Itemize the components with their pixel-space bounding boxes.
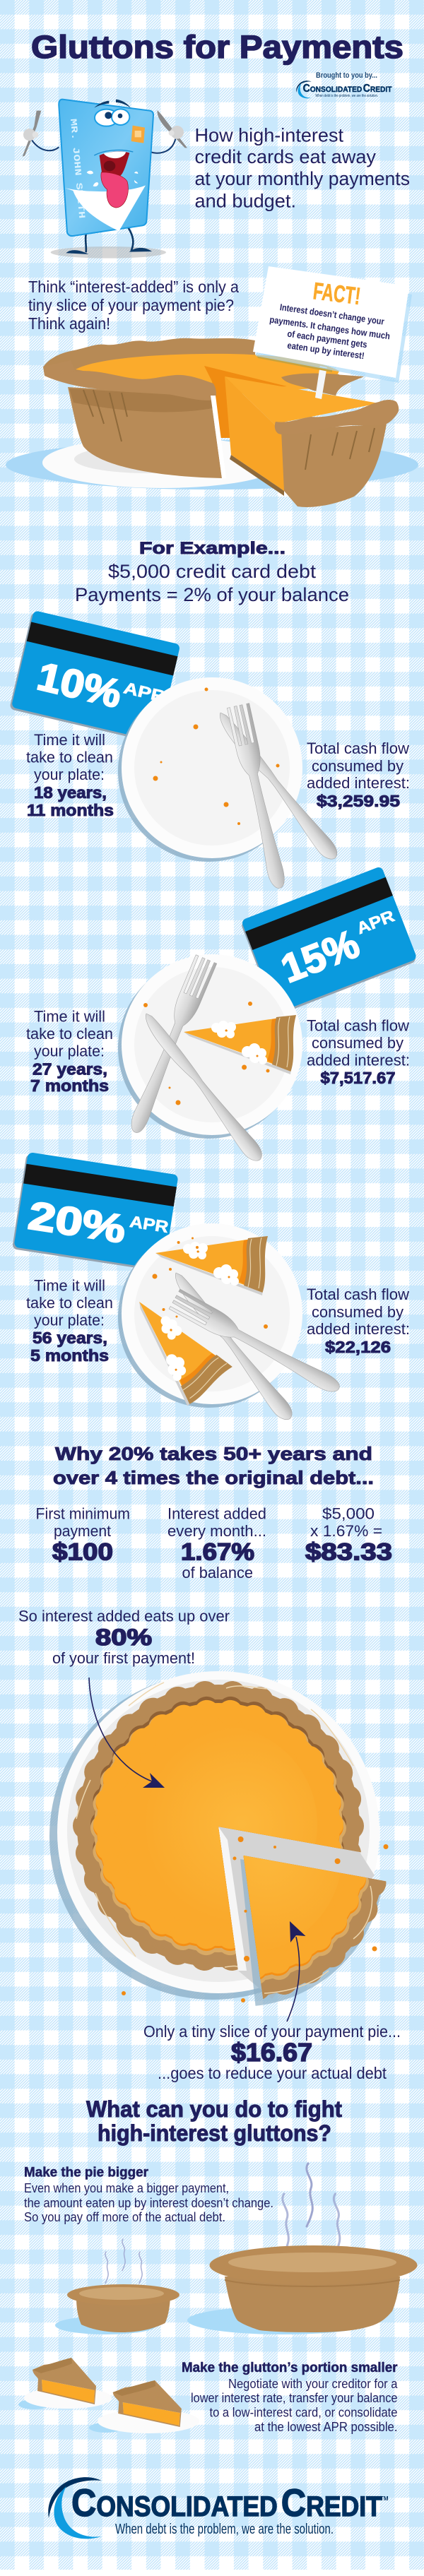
text: cash flow 20%: added interest: bbox=[307, 1320, 410, 1338]
text: 80% callout: 80% bbox=[95, 1625, 152, 1650]
text: time 20%: your plate: bbox=[34, 1311, 105, 1329]
stat: interest added: every month... bbox=[167, 1522, 266, 1540]
callout: FACT sign: of each payment gets bbox=[287, 328, 368, 350]
text: make the pie bigger bbox=[24, 2166, 273, 2224]
heading: what can you do bbox=[86, 2096, 342, 2146]
text: time 20%: 5 months bbox=[30, 1346, 109, 1365]
small logo: When debt is the problem, we are the solution. bbox=[315, 94, 378, 98]
text: time 10%: take to clean bbox=[26, 749, 113, 766]
text: time 10%: 11 months bbox=[27, 801, 114, 819]
question text bbox=[28, 278, 239, 333]
text: make the pie bigger: the amount eaten up by interest doesn’t change. bbox=[24, 2196, 273, 2210]
text: time 10%: 18 years, bbox=[34, 783, 107, 802]
pie slice bbox=[243, 1856, 386, 1999]
stat: interest amount: $83.33 bbox=[305, 1538, 392, 1565]
callout: FACT sign: payments. It changes how much bbox=[269, 314, 391, 341]
text: time 20%: Time it will bbox=[34, 1277, 105, 1294]
text: cash flow 20%: Total cash flow bbox=[307, 1286, 409, 1303]
icon: two pie slices on plates bbox=[18, 2358, 199, 2433]
text: tiny slice callout bbox=[143, 2022, 401, 2082]
heading: for example: For Example... bbox=[139, 539, 285, 558]
text: make the pie bigger: Make the pie bigger bbox=[24, 2166, 149, 2180]
text: cash flow 20% bbox=[307, 1286, 410, 1356]
intro text bbox=[195, 124, 410, 212]
heading: what can you do: What can you do to fight bbox=[86, 2096, 342, 2122]
plate: 20% with two pie slices bbox=[110, 1223, 343, 1424]
text: make the portion smaller: to a low-interest card, or consolidate bbox=[209, 2406, 397, 2420]
logo: Consolidated Credit: When debt is the problem, we are the solution. bbox=[115, 2522, 334, 2537]
text: make the pie bigger: So you pay off more of the actual debt. bbox=[24, 2210, 225, 2224]
text: cash flow 10%: added interest: bbox=[307, 774, 410, 792]
callout: FACT sign: Interest doesn’t change your bbox=[279, 302, 385, 327]
logo: Consolidated Credit: CONSOLIDATED CREDIT bbox=[71, 2481, 382, 2525]
text: time 15%: 27 years, bbox=[33, 1060, 107, 1078]
card: 10% APR: APR bbox=[122, 678, 167, 706]
text: time 20% bbox=[26, 1277, 113, 1365]
callout: FACT sign: FACT! bbox=[312, 278, 362, 310]
stat: first minimum payment: $100 bbox=[52, 1538, 113, 1565]
card: 10% APR bbox=[9, 610, 180, 744]
text: cash flow 15%: consumed by bbox=[312, 1034, 404, 1052]
heading: why 20%: over 4 times the original debt... bbox=[53, 1467, 374, 1488]
arrow: to pie remainder bbox=[89, 1678, 165, 1788]
icon: credit card mascot bbox=[23, 100, 187, 259]
plate: 15% with pie slice bbox=[118, 954, 302, 1165]
title: Gluttons for Payments bbox=[31, 29, 404, 65]
text: tiny slice callout: $16.67 bbox=[231, 2038, 312, 2067]
card: 10% APR: 10% bbox=[33, 653, 126, 716]
text: tiny slice callout: Only a tiny slice of your payment pie... bbox=[143, 2022, 401, 2041]
text: cash flow 10%: consumed by bbox=[312, 757, 404, 775]
slice shadow bbox=[240, 1859, 381, 2006]
intro text: at your monthly payments bbox=[195, 168, 410, 189]
illustration: pie with slice pulled out bbox=[6, 338, 418, 507]
card: 20% APR: APR bbox=[129, 1212, 170, 1236]
icon: big pie bbox=[187, 2245, 417, 2334]
heading: why 20% bbox=[53, 1443, 374, 1488]
text: time 15%: 7 months bbox=[30, 1076, 109, 1095]
text: time 15%: your plate: bbox=[34, 1043, 105, 1060]
intro text: How high-interest bbox=[195, 124, 343, 146]
heading: what can you do: high-interest gluttons? bbox=[98, 2120, 331, 2146]
text: time 10% bbox=[26, 731, 114, 819]
text: time 20%: 56 years, bbox=[33, 1329, 107, 1347]
card: 20% APR: 20% bbox=[25, 1193, 129, 1252]
text: 80% callout: So interest added eats up over bbox=[18, 1608, 230, 1625]
stat: interest added: of balance bbox=[182, 1564, 253, 1581]
text: make the pie bigger: Even when you make a bigger payment, bbox=[24, 2181, 229, 2195]
text: time 15% bbox=[26, 1007, 113, 1095]
callout: FACT sign: eaten up by interest! bbox=[287, 340, 365, 361]
icon: small pie bbox=[55, 2239, 179, 2334]
card: 15% APR: APR bbox=[354, 906, 397, 937]
heading: for example bbox=[75, 539, 349, 605]
small logo bbox=[296, 81, 392, 98]
heading: for example: Payments = 2% of your balance bbox=[75, 584, 349, 605]
text: cash flow 15% bbox=[307, 1017, 410, 1087]
text: time 10%: Time it will bbox=[34, 731, 105, 749]
stat: first minimum payment: First minimum bbox=[35, 1504, 130, 1523]
stat: first minimum payment bbox=[35, 1504, 130, 1565]
arrow: to pie slice bbox=[287, 1921, 305, 2022]
card: 15% APR: 15% bbox=[275, 921, 365, 991]
text: make the portion smaller: Make the glutton’s portion smaller bbox=[182, 2361, 398, 2375]
illustration: large pie top view bbox=[49, 1671, 389, 2007]
sponsor credit bbox=[296, 71, 392, 98]
text: time 20%: take to clean bbox=[26, 1294, 113, 1312]
text: make the portion smaller: Negotiate with your creditor for a bbox=[228, 2377, 398, 2391]
intro text: credit cards eat away bbox=[195, 146, 376, 167]
card: 15% APR bbox=[240, 866, 418, 1016]
stat: interest added: Interest added bbox=[167, 1504, 266, 1523]
logo: Consolidated Credit bbox=[48, 2477, 389, 2539]
text: make the portion smaller: lower interest rate, transfer your balance bbox=[191, 2391, 397, 2405]
question text: tiny slice of your payment pie? bbox=[28, 296, 234, 314]
card: 20% APR bbox=[12, 1152, 179, 1272]
text: 80% callout: of your first payment! bbox=[52, 1649, 195, 1667]
mascot name: MR. JOHN SMITH bbox=[68, 118, 87, 219]
question text: Think “interest-added” is only a bbox=[28, 278, 239, 296]
text: tiny slice callout: ...goes to reduce your actual debt bbox=[158, 2064, 387, 2082]
text: cash flow 15%: $7,517.67 bbox=[321, 1069, 396, 1087]
text: cash flow 10%: Total cash flow bbox=[307, 740, 409, 757]
heading: why 20%: Why 20% takes 50+ years and bbox=[55, 1443, 372, 1464]
text: 80% callout bbox=[18, 1608, 230, 1667]
stat: first minimum payment: payment bbox=[54, 1522, 111, 1540]
text: time 10%: your plate: bbox=[34, 766, 105, 783]
stat: interest added: 1.67% bbox=[181, 1538, 254, 1565]
stat: interest amount: x 1.67% = bbox=[310, 1522, 382, 1540]
text: cash flow 15%: Total cash flow bbox=[307, 1017, 409, 1034]
sponsor credit: Brought to you by... bbox=[316, 71, 377, 80]
logo: Consolidated Credit: TM bbox=[380, 2495, 389, 2502]
stat: interest amount bbox=[305, 1504, 392, 1565]
text: cash flow 10%: $3,259.95 bbox=[317, 792, 400, 810]
stat: interest amount: $5,000 bbox=[322, 1504, 375, 1523]
text: cash flow 20%: $22,126 bbox=[325, 1338, 391, 1356]
text: cash flow 10% bbox=[307, 740, 410, 810]
heading: for example: $5,000 credit card debt bbox=[108, 561, 317, 582]
callout: FACT sign bbox=[253, 266, 412, 399]
small logo: CONSOLIDATED CREDIT bbox=[303, 82, 392, 95]
icon: steam over big pie bbox=[283, 2164, 340, 2257]
stat: interest added bbox=[167, 1504, 266, 1581]
intro text: and budget. bbox=[195, 191, 296, 212]
text: time 15%: Time it will bbox=[34, 1007, 105, 1026]
text: cash flow 15%: added interest: bbox=[307, 1051, 410, 1069]
question text: Think again! bbox=[28, 314, 110, 333]
text: make the portion smaller: at the lowest APR possible. bbox=[254, 2420, 397, 2434]
text: time 15%: take to clean bbox=[26, 1025, 113, 1043]
pie remainder bbox=[76, 1682, 360, 1967]
text: make the portion smaller bbox=[182, 2361, 398, 2434]
plate: 10% empty plate bbox=[118, 677, 341, 891]
text: cash flow 20%: consumed by bbox=[312, 1303, 404, 1321]
